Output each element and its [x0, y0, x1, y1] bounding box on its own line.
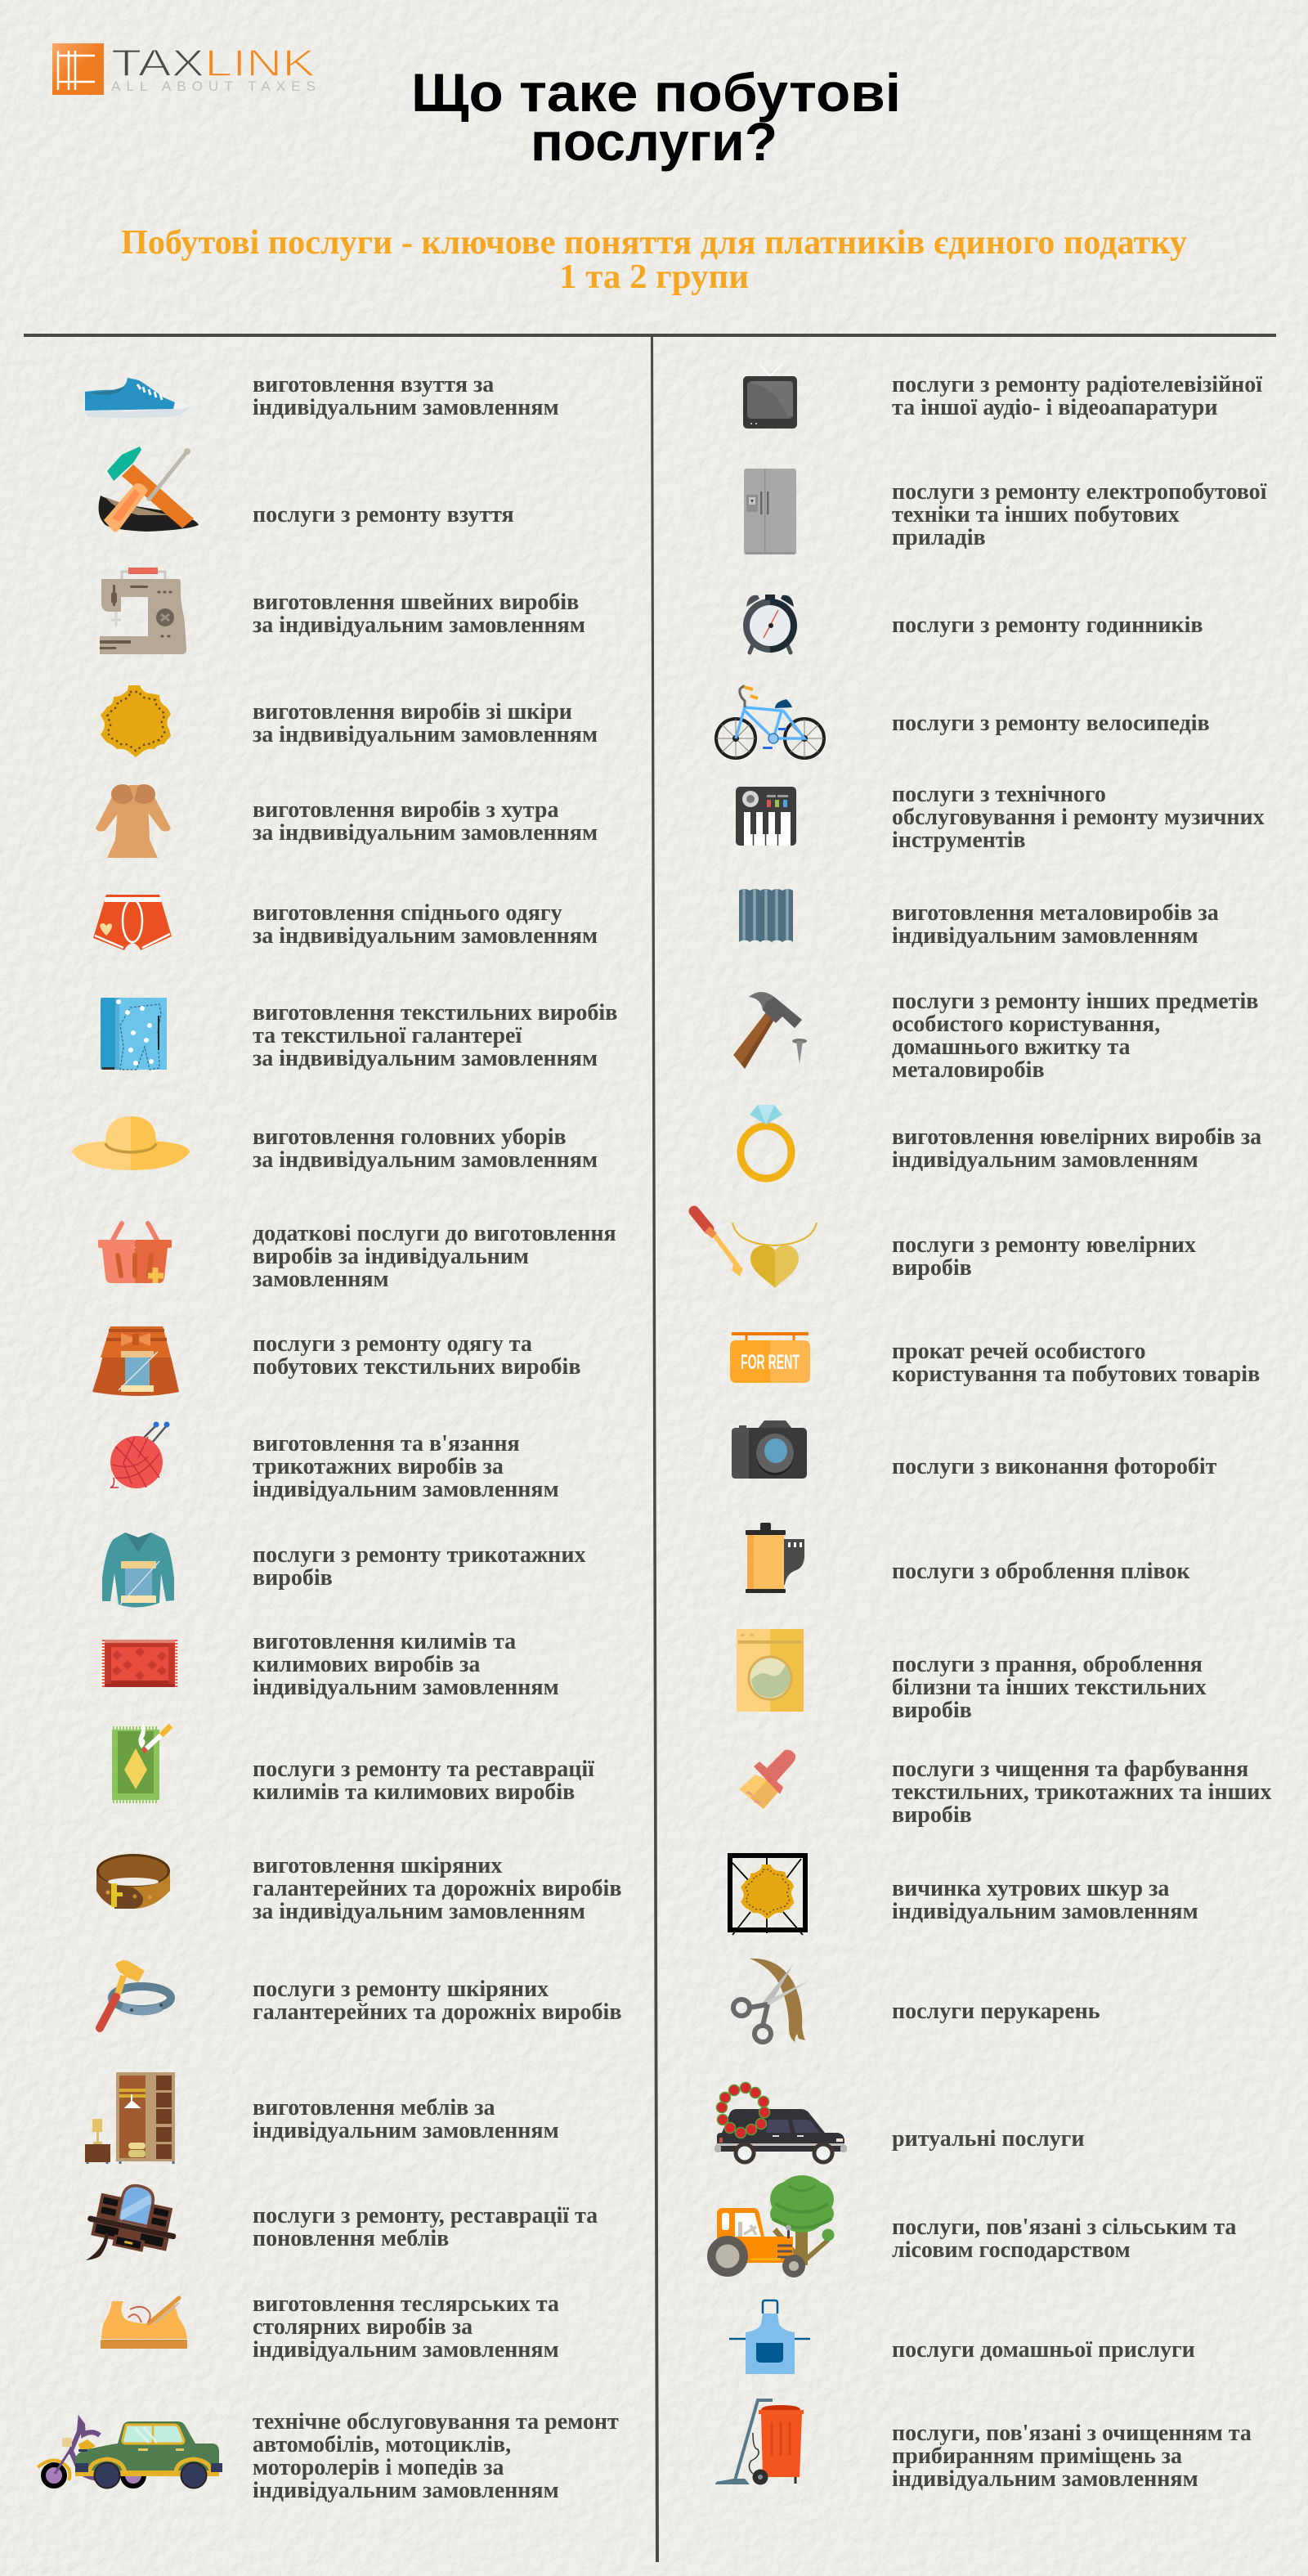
title [411, 62, 901, 172]
row: годинники [743, 595, 1203, 653]
icon: for rent sign: FOR RENT [741, 1351, 800, 1374]
icon: vacuum cleaner [715, 2400, 804, 2484]
row: аудіо-відео [743, 364, 1262, 429]
text: галантерейних та дорожніх виробів [253, 1876, 621, 1901]
text: послуги з оброблення плівок [892, 1559, 1190, 1584]
logo: TaxLink: TAX LINK [111, 42, 316, 84]
row: ремонт килимів [112, 1721, 594, 1805]
icon: refrigerator [744, 469, 796, 554]
icon: diamond ring [741, 1105, 791, 1178]
icon: hide in frame [730, 1856, 805, 1935]
text: за індвивідуальним замовленням [253, 923, 598, 949]
text: послуги, пов'язані з очищенням та [892, 2421, 1252, 2446]
icon: fur coat [96, 784, 171, 858]
text: побутових текстильних виробів [253, 1354, 580, 1380]
text: обслуговування і ремонту музичних [892, 805, 1265, 830]
icon: wardrobe [85, 2072, 175, 2164]
icon: sneaker [85, 378, 190, 418]
row: взуття [85, 372, 559, 420]
icon: green rug with cigarette [112, 1721, 171, 1802]
icon: vanity table [83, 2177, 185, 2260]
icon: fabric roll [101, 998, 167, 1070]
text: послуги з ремонту ювелірних [892, 1232, 1196, 1258]
text: послуги з ремонту, реставрації та [253, 2203, 598, 2228]
text: за індвивідуальним замовленням [253, 722, 598, 747]
row: трикотаж [110, 1421, 559, 1502]
text: прокат речей особистого [892, 1339, 1146, 1364]
text: галантерейних та дорожніх виробів [253, 1999, 621, 2025]
text: послуги з ремонту велосипедів [892, 711, 1210, 736]
text: килимових виробів за [253, 1652, 480, 1677]
text: індивідуальним замовленням [253, 2478, 559, 2503]
text: виробів [892, 1698, 972, 1723]
row: хутро [96, 784, 598, 858]
text: індивідуальним замовленням [892, 1147, 1198, 1173]
text: індивідуальним замовленням [892, 2466, 1198, 2492]
row: столярні вироби [101, 2291, 559, 2363]
text: послуги з ремонту трикотажних [253, 1542, 585, 1568]
row: сільське господарство [707, 2175, 1236, 2278]
row: ремонт трикотажу [102, 1533, 585, 1608]
icon: tractor and tree [707, 2175, 834, 2278]
text: виготовлення та в'язання [253, 1431, 520, 1456]
icon: scissors and hair [733, 1959, 810, 2042]
icon: sun hat [72, 1116, 190, 1170]
subtitle: Побутові послуги - ключове поняття для платників єдиного податку [121, 224, 1187, 262]
text: столярних виробів за [253, 2314, 473, 2340]
text: індивідуальним замовленням [253, 1675, 559, 1700]
row: прокат [730, 1332, 1260, 1387]
icon: paint brush [739, 1750, 795, 1809]
text: виготовлення ювелірних виробів за [892, 1124, 1261, 1150]
horizontal divider [24, 334, 1276, 337]
logo: TaxLink: ALL ABOUT TAXES [111, 79, 316, 94]
row: перукарні [733, 1959, 1100, 2042]
row: шкіряна галантерея [96, 1853, 621, 1924]
row: інші предмети [733, 989, 1258, 1083]
text: за індвивідуальним замовленням [253, 1046, 598, 1071]
right column [694, 364, 1271, 2492]
text: виробів [253, 1565, 333, 1591]
text: інструментів [892, 828, 1026, 853]
text: замовленням [253, 1267, 389, 1292]
text: послуги з ремонту взуття [253, 502, 514, 527]
text: виготовлення швейних виробів [253, 590, 579, 615]
text: послуги з ремонту шкіряних [253, 1977, 549, 2002]
text: додаткові послуги до виготовлення [253, 1221, 616, 1246]
icon: bicycle [716, 686, 824, 758]
text: послуги з прання, оброблення [892, 1652, 1203, 1677]
row: електропобутова техніка [744, 469, 1267, 554]
text: металовиробів [892, 1057, 1045, 1083]
text: приладів [892, 525, 986, 550]
row: плівки [746, 1523, 1190, 1593]
icon: sweater with spool [102, 1533, 174, 1608]
row: додаткові послуги [98, 1221, 616, 1292]
icon: hammer, screwdriver, shoe [99, 447, 199, 532]
icon: film roll [746, 1523, 804, 1593]
subtitle: 1 та 2 групи [559, 258, 749, 296]
icon: corrugated metal [739, 889, 793, 942]
icon: hammer and belt [100, 1960, 171, 2028]
text: виготовлення спіднього одягу [253, 900, 562, 926]
text: послуги з ремонту та реставрації [253, 1757, 594, 1782]
text: індивідуальним замовленням [253, 2337, 559, 2363]
icon: hearse with wreath [714, 2082, 847, 2162]
row: текстиль [101, 998, 617, 1071]
row: ремонт галантереї [100, 1960, 621, 2028]
row: домашня прислуга [729, 2300, 1195, 2374]
row: меблі [85, 2072, 559, 2164]
text: за індвивідуальним замовленням [253, 1147, 598, 1173]
row: металовироби [739, 889, 1219, 949]
icon: shopping basket [98, 1223, 172, 1283]
icon: washing machine [737, 1629, 804, 1712]
text: вичинка хутрових шкур за [892, 1876, 1169, 1901]
subtitle [121, 224, 1187, 296]
text: послуги з технічного [892, 782, 1106, 807]
text: за індивідуальним замовленням [253, 1899, 585, 1924]
text: індивідуальним замовленням [253, 1477, 559, 1502]
text: послуги, пов'язані з сільським та [892, 2215, 1236, 2240]
title: Що таке побутові [411, 62, 901, 123]
row: вичинка шкур [730, 1856, 1198, 1935]
row: ритуальні [714, 2082, 1085, 2162]
row: велосипеди [716, 686, 1210, 758]
text: білизни та інших текстильних [892, 1675, 1207, 1700]
icon: underwear [93, 895, 172, 950]
row: прибирання [715, 2400, 1252, 2492]
text: виготовлення металовиробів за [892, 900, 1219, 926]
text: текстильних, трикотажних та інших [892, 1779, 1271, 1805]
icon: for rent sign [730, 1332, 810, 1383]
text: виготовлення теслярських та [253, 2291, 559, 2317]
text: за індвивідуальним замовленням [253, 820, 598, 846]
text: виготовлення головних уборів [253, 1124, 567, 1150]
text: індивідуальним замовленням [892, 923, 1198, 949]
text: виготовлення килимів та [253, 1629, 516, 1654]
text: послуги з ремонту годинників [892, 613, 1203, 638]
text: послуги з ремонту радіотелевізійної [892, 372, 1262, 397]
row: килими [103, 1629, 559, 1700]
icon: apron [729, 2300, 810, 2374]
title: послуги? [531, 111, 777, 172]
text: послуги домашньої прислуги [892, 2337, 1195, 2363]
text: індивідуальним замовленням [253, 2118, 559, 2143]
left column [38, 372, 621, 2503]
row: прання [737, 1629, 1207, 1723]
text: виготовлення меблів за [253, 2095, 495, 2120]
text: моторолерів і мопедів за [253, 2455, 504, 2480]
text: послуги з чищення та фарбування [892, 1757, 1248, 1782]
text: користування та побутових товарів [892, 1362, 1260, 1387]
icon: leather hide [101, 685, 171, 757]
text: за індивідуальним замовленням [253, 613, 585, 638]
icon: synthesizer [736, 787, 796, 846]
text: виготовлення виробів зі шкіри [253, 699, 572, 725]
row: головні убори [72, 1116, 598, 1173]
text: виготовлення текстильних виробів [253, 1000, 617, 1025]
text: виготовлення виробів з хутра [253, 797, 558, 823]
text: килимів та килимових виробів [253, 1779, 575, 1805]
logo: TaxLink [52, 42, 316, 95]
row: спідній одяг [93, 895, 598, 950]
icon: alarm clock [743, 595, 797, 653]
vertical divider [651, 337, 659, 2562]
icon: wood plane [101, 2298, 187, 2349]
text: поновлення меблів [253, 2226, 449, 2251]
row: ремонт одягу [92, 1326, 580, 1396]
text: виробів [892, 1255, 972, 1281]
text: особистого користування, [892, 1012, 1160, 1037]
text: та іншої аудіо- і відеоапаратури [892, 395, 1217, 420]
text: виготовлення взуття за [253, 372, 494, 397]
text: технічне обслуговування та ремонт [253, 2409, 619, 2435]
row: ремонт ювелірних [694, 1211, 1196, 1288]
icon: belt [96, 1855, 170, 1909]
icon: red rug [103, 1640, 177, 1687]
icon: car and motorcycle [38, 2421, 222, 2488]
text: послуги з ремонту електропобутової [892, 479, 1267, 505]
row: автомобілі [38, 2409, 619, 2503]
row: музичні інструменти [736, 782, 1265, 853]
icon: yarn ball [110, 1421, 170, 1488]
row: ремонт меблів [83, 2177, 598, 2260]
text: послуги з ремонту інших предметів [892, 989, 1258, 1014]
text: індивідуальним замовленням [253, 395, 559, 420]
text: та текстильної галантереї [253, 1023, 522, 1048]
row: ювелірні вироби [741, 1105, 1261, 1178]
icon: screwdriver and necklace [694, 1211, 817, 1288]
text: прибиранням приміщень за [892, 2444, 1182, 2469]
icon: hammer and nail [733, 992, 807, 1069]
text: індивідуальним замовленням [892, 1899, 1198, 1924]
text: виготовлення шкіряних [253, 1853, 502, 1878]
row: швейні вироби [100, 568, 585, 654]
row: фоторобота [732, 1420, 1217, 1479]
icon: camera [732, 1420, 807, 1479]
text: виробів за індивідуальним [253, 1244, 529, 1269]
row: ремонт взуття [99, 447, 514, 532]
text: трикотажних виробів за [253, 1454, 504, 1479]
text: домашнього вжитку та [892, 1034, 1130, 1060]
row: чищення, фарбування [739, 1750, 1271, 1828]
text: виробів [892, 1802, 972, 1828]
icon: TV [743, 364, 797, 429]
text: послуги з виконання фоторобіт [892, 1454, 1217, 1479]
text: послуги перукарень [892, 1999, 1100, 2024]
text: техніки та інших побутових [892, 502, 1180, 527]
row: шкіра [101, 685, 598, 757]
text: автомобілів, мотоциклів, [253, 2432, 511, 2457]
text: послуги з ремонту одягу та [253, 1331, 532, 1357]
text: лісовим господарством [892, 2237, 1131, 2263]
icon: skirt with spool [92, 1326, 179, 1396]
text: ритуальні послуги [892, 2126, 1085, 2152]
icon: sewing machine [100, 568, 186, 654]
